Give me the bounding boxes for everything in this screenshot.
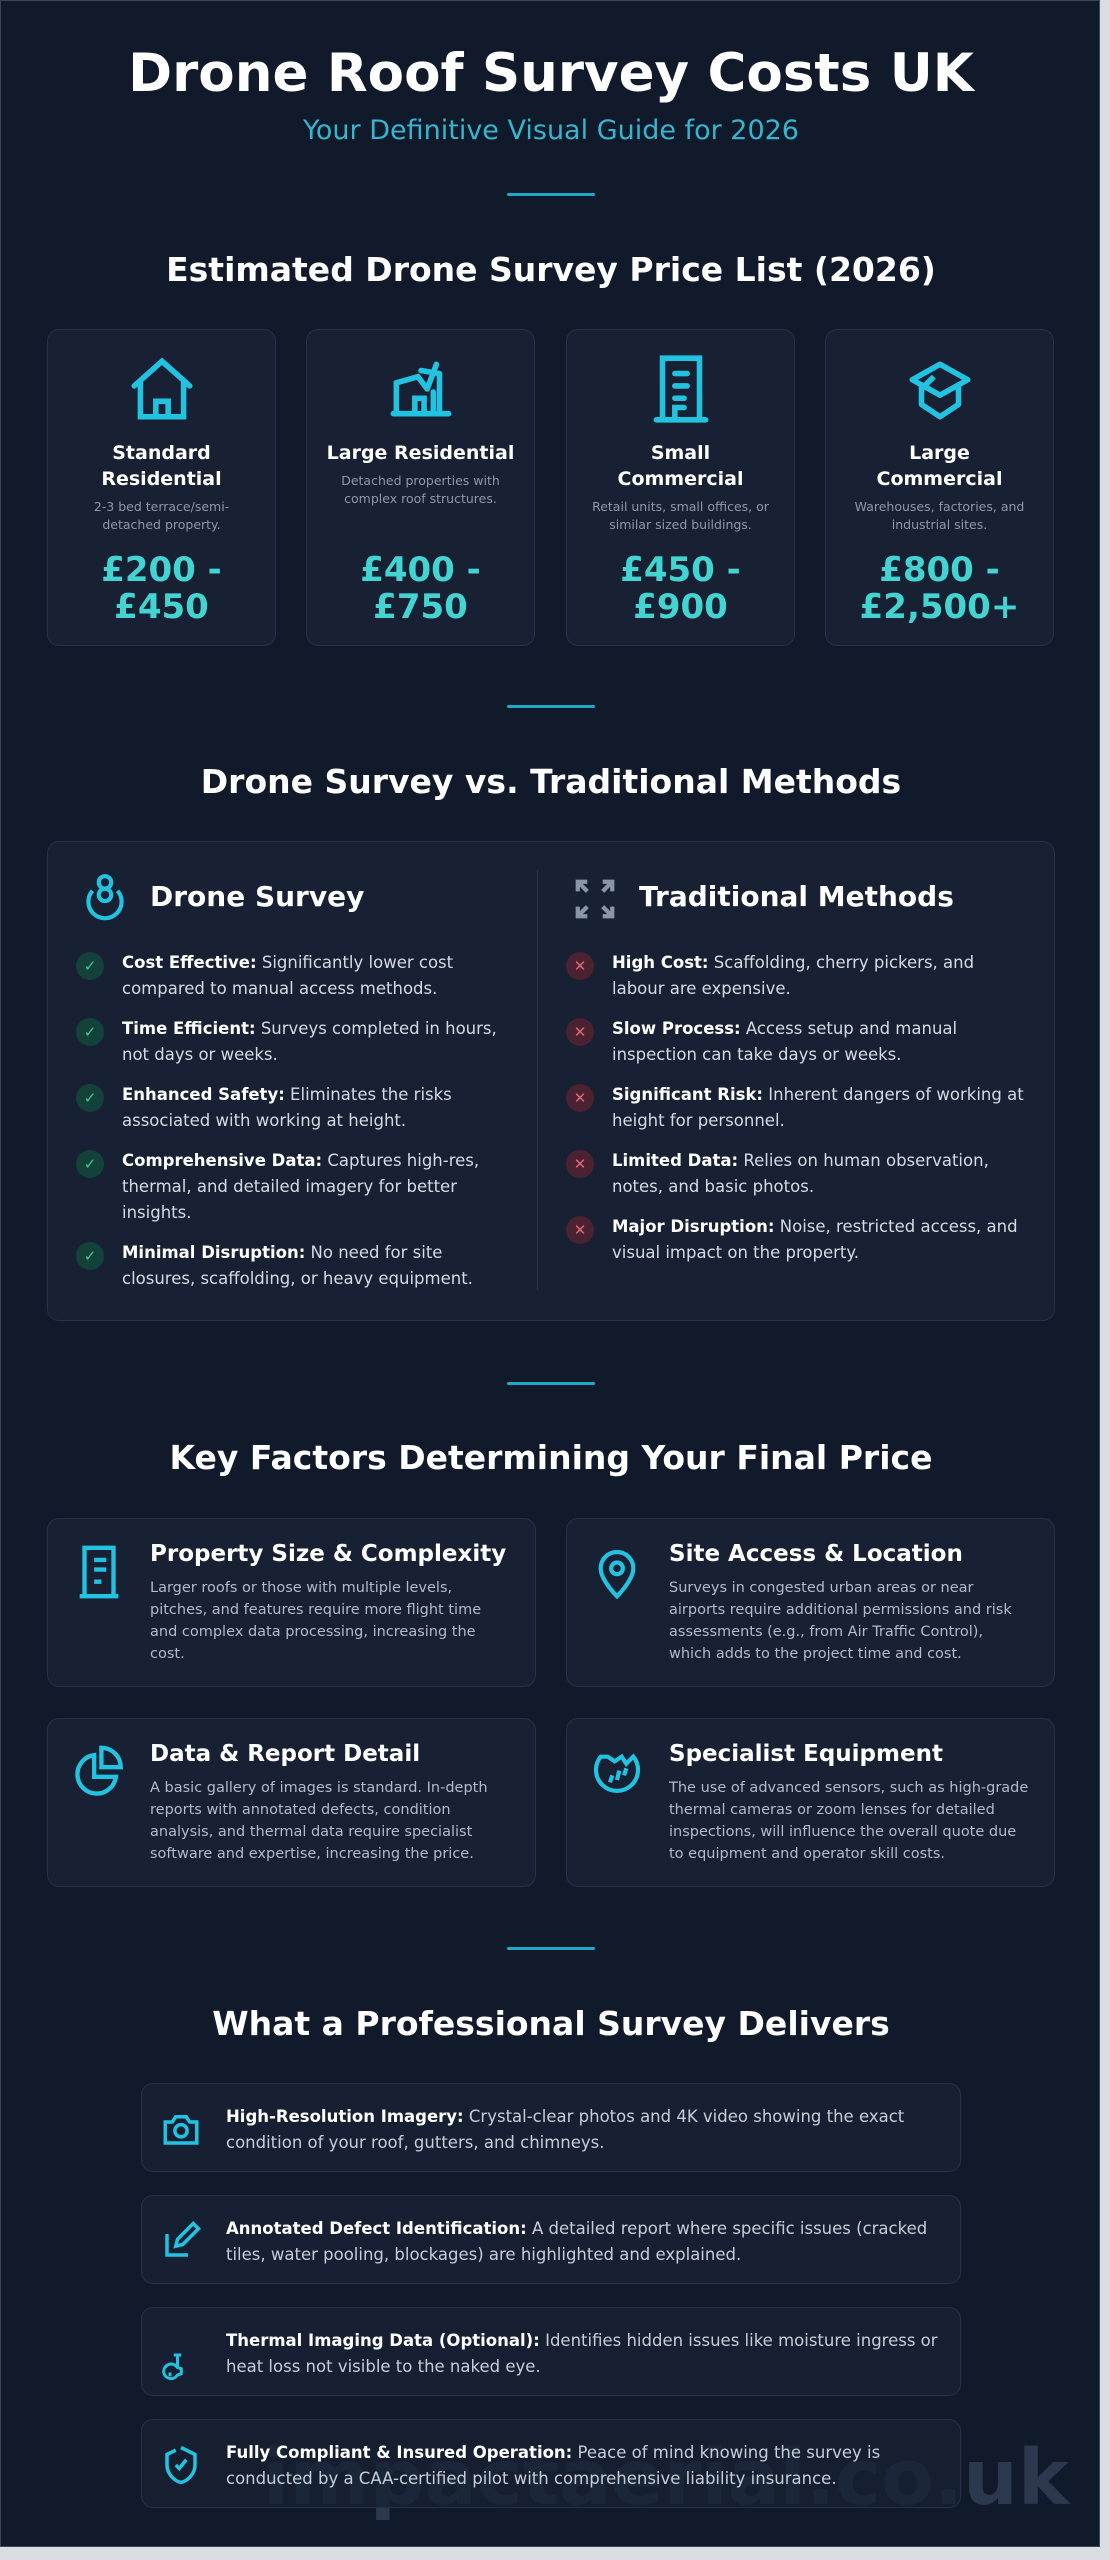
panel: factor site access xyxy=(566,1518,1055,1687)
list: traditional drawbacks: Major Disruption: Noise, restricted access, and visual impact on the property. xyxy=(612,1217,1018,1262)
card: small commercial: Small xyxy=(651,442,710,464)
card: small commercial: £450 - xyxy=(620,550,741,590)
card: standard residential: £450 xyxy=(114,587,209,627)
icon: thermal xyxy=(162,2354,183,2380)
heading: factors: Key Factors Determining Your Final Price xyxy=(170,1438,932,1477)
list: traditional drawbacks: ✕ xyxy=(574,1089,586,1107)
icon: shield xyxy=(165,2446,197,2484)
card: large commercial: £800 - xyxy=(879,550,1000,590)
panel: deliverable imagery: High-Resolution Imagery: Crystal-clear photos and 4K video showing the exact condition of your roof, gutters, and chimneys. xyxy=(226,2107,904,2152)
card: large residential: £400 - xyxy=(360,550,481,590)
list: traditional drawbacks xyxy=(566,952,1024,1262)
panel: deliverable imagery xyxy=(141,2083,961,2172)
card: large residential xyxy=(306,329,535,646)
panel: factor data report xyxy=(47,1718,536,1887)
panel: factor property size: Larger roofs or those with multiple levels, pitches, and features require more flight time and complex data processing, increasing the cost. xyxy=(150,1580,481,1662)
card: small commercial: similar sized buildings. xyxy=(609,517,752,532)
card: small commercial: Commercial xyxy=(618,468,743,490)
heading: traditional: Traditional Methods xyxy=(639,880,954,913)
icon: document xyxy=(80,1546,118,1598)
card: standard residential xyxy=(47,329,276,646)
list: drone benefits: ✓ xyxy=(84,1247,96,1265)
panel: factor equipment xyxy=(566,1718,1055,1887)
list: traditional drawbacks: ✕ xyxy=(574,1155,586,1173)
icon: building xyxy=(654,355,708,423)
list: drone benefits: Comprehensive Data: Captures high-res, thermal, and detailed imagery for better insights. xyxy=(122,1151,479,1222)
heading: price list: Estimated Drone Survey Price List (2026) xyxy=(166,250,936,289)
card: small commercial: £900 xyxy=(633,587,728,627)
list: traditional drawbacks: High Cost: Scaffolding, cherry pickers, and labour are expensive. xyxy=(612,953,974,998)
list: drone benefits: ✓ xyxy=(84,1155,96,1173)
icon: pie chart xyxy=(75,1746,123,1796)
list: drone benefits: Cost Effective: Significantly lower cost compared to manual access methods. xyxy=(122,953,453,998)
card: standard residential: detached property. xyxy=(102,517,221,532)
card: standard residential: 2-3 bed terrace/semi- xyxy=(94,499,229,514)
card: large commercial xyxy=(825,329,1054,646)
title: Drone Roof Survey Costs UK xyxy=(128,43,974,104)
list: drone benefits: Enhanced Safety: Eliminates the risks associated with working at height. xyxy=(122,1085,452,1130)
card: standard residential: Residential xyxy=(101,468,222,490)
icon: cap xyxy=(910,362,970,420)
card: small commercial xyxy=(566,329,795,646)
panel: deliverable defects: Annotated Defect Identification: A detailed report where specific issues (cracked tiles, water pooling, blockages) are highlighted and explained. xyxy=(226,2219,927,2264)
card: standard residential: Standard xyxy=(112,442,211,464)
list: traditional drawbacks: ✕ xyxy=(574,1221,586,1239)
list: traditional drawbacks: Slow Process: Access setup and manual inspection can take days or weeks. xyxy=(612,1019,957,1064)
panel: deliverable thermal: Thermal Imaging Data (Optional): Identifies hidden issues like moisture ingress or heat loss not visible to the naked eye. xyxy=(226,2331,938,2376)
panel: deliverable defects xyxy=(141,2195,961,2284)
icon: expand arrows xyxy=(576,880,614,918)
icon: drone xyxy=(86,874,124,920)
panel: factor property size xyxy=(47,1518,536,1687)
icon: location pin xyxy=(598,1550,636,1600)
panel: factor data report: Data & Report Detail xyxy=(150,1741,420,1767)
card: large residential: complex roof structures. xyxy=(344,491,497,506)
card: small commercial: Retail units, small offices, or xyxy=(592,499,769,514)
panel: price cards xyxy=(47,329,1054,646)
card: large residential: £750 xyxy=(373,587,468,627)
heading: drone survey: Drone Survey xyxy=(150,880,364,913)
panel: factor property size: Property Size & Complexity xyxy=(150,1541,506,1567)
list: drone benefits: Minimal Disruption: No need for site closures, scaffolding, or heavy equipment. xyxy=(122,1243,473,1288)
icon: large house xyxy=(390,362,452,416)
panel: factor data report: A basic gallery of images is standard. In-depth reports with annotated defects, condition analysis, and thermal data require specialist software and expertise, increasing the price. xyxy=(150,1780,488,1862)
list: drone benefits: ✓ xyxy=(84,957,96,975)
panel: deliverable compliance xyxy=(141,2419,961,2508)
card: large commercial: Commercial xyxy=(877,468,1002,490)
list: traditional drawbacks: Significant Risk: Inherent dangers of working at height for personnel. xyxy=(612,1085,1024,1130)
panel: factor equipment: Specialist Equipment xyxy=(669,1741,943,1767)
icon: house xyxy=(132,358,192,420)
card: large commercial: Warehouses, factories, and xyxy=(855,499,1024,514)
list: traditional drawbacks: Limited Data: Relies on human observation, notes, and basic photos. xyxy=(612,1151,989,1196)
card: standard residential: £200 - xyxy=(101,550,222,590)
panel: factor site access: Site Access & Location xyxy=(669,1541,963,1567)
list: drone benefits: Time Efficient: Surveys completed in hours, not days or weeks. xyxy=(122,1019,497,1064)
panel: factor equipment: The use of advanced sensors, such as high-grade thermal cameras or zoom lenses for detailed inspections, will influence the overall quote due to equipment and operator skill costs. xyxy=(669,1780,1028,1862)
heading: delivers: What a Professional Survey Delivers xyxy=(212,2004,890,2043)
subtitle: Your Definitive Visual Guide for 2026 xyxy=(303,115,799,146)
list: drone benefits: ✓ xyxy=(84,1089,96,1107)
watermark: impactaerial.co.uk xyxy=(263,2434,1069,2523)
icon: pencil xyxy=(165,2221,201,2257)
card: large commercial: Large xyxy=(909,442,970,464)
panel: deliverable compliance: Fully Compliant & Insured Operation: Peace of mind knowing the survey is conducted by a CAA-certified pilot with comprehensive liability insurance. xyxy=(226,2443,880,2488)
icon: camera xyxy=(164,2115,198,2145)
list: traditional drawbacks: ✕ xyxy=(574,957,586,975)
list: drone benefits xyxy=(76,952,497,1288)
heading: comparison: Drone Survey vs. Traditional Methods xyxy=(201,762,901,801)
panel: deliverable thermal xyxy=(141,2307,961,2396)
panel: factor site access: Surveys in congested urban areas or near airports require additional permissions and risk assessments (e.g., from Air Traffic Control), which adds to the project time and cost. xyxy=(669,1580,1012,1662)
list: traditional drawbacks: ✕ xyxy=(574,1023,586,1041)
card: large commercial: £2,500+ xyxy=(860,587,1019,627)
card: large residential: Detached properties with xyxy=(341,473,500,488)
icon: gauge xyxy=(594,1754,640,1793)
panel: comparison xyxy=(47,841,1055,1321)
card: large residential: Large Residential xyxy=(327,442,514,464)
card: large commercial: industrial sites. xyxy=(892,517,987,532)
list: drone benefits: ✓ xyxy=(84,1023,96,1041)
